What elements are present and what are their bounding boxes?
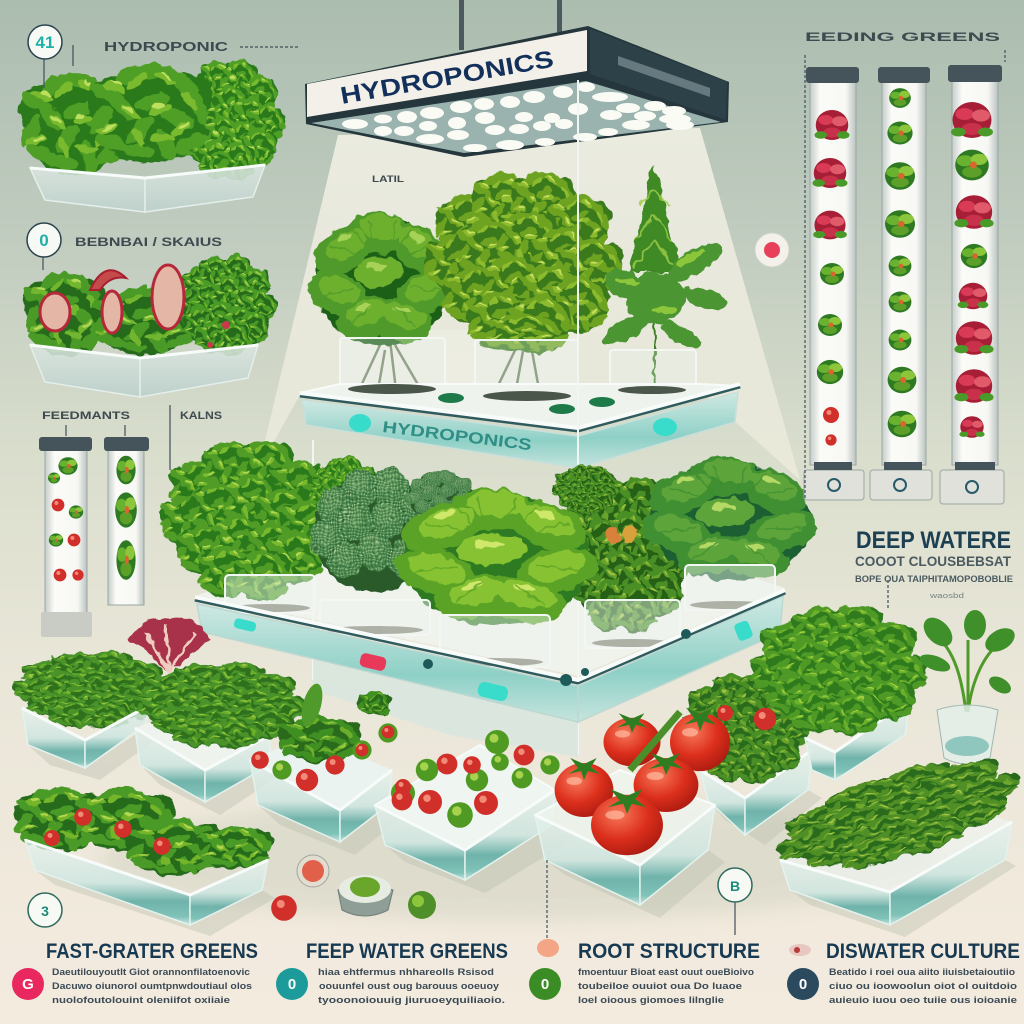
bottom-right herb tray xyxy=(780,790,1012,925)
lower badge right: B xyxy=(730,878,740,894)
upper glass wall fill xyxy=(340,330,578,395)
lower badge left xyxy=(28,893,62,927)
column: water greens: tyooonoiouuig jiuruoeyquiliaoio. xyxy=(318,995,505,1006)
right tube 1 xyxy=(804,67,864,500)
dashed drop to root heading xyxy=(537,860,559,957)
lower deck surface xyxy=(197,560,785,676)
second badge: 0 xyxy=(39,231,49,250)
column: fast greens: FAST-GRATER GREENS xyxy=(46,940,258,963)
column: root structure xyxy=(529,940,760,1006)
small leafy ball xyxy=(408,891,436,919)
row plant 3 xyxy=(251,681,398,791)
column: water greens: FEEP WATER GREENS xyxy=(306,940,508,963)
deep water text: DEEP WATERE xyxy=(856,527,1011,554)
row tray 9 xyxy=(805,700,910,780)
left tube 2 xyxy=(104,437,149,605)
under-shelf glass xyxy=(313,660,578,757)
top-left label: HYDROPONIC xyxy=(104,39,229,54)
cut tomato xyxy=(297,855,329,887)
top-left plant xyxy=(17,58,284,181)
small label: lab: LATIL xyxy=(372,174,405,184)
middle plant: dark broccoli xyxy=(310,468,475,592)
jar soil lower xyxy=(230,601,770,666)
tomatoes xyxy=(555,707,730,855)
deep water text: waosbd xyxy=(929,593,964,600)
middle plant: broad leaf xyxy=(635,454,823,584)
bowl of greens xyxy=(338,875,393,916)
hanging rods xyxy=(459,0,562,50)
top-left badge xyxy=(28,25,73,88)
vent grille xyxy=(618,56,710,97)
bottom-right herbs xyxy=(763,737,1024,894)
deep water text: COOOT CLOUSBEBSAT xyxy=(855,553,1011,569)
top tier jars xyxy=(340,338,696,400)
floor shadow xyxy=(100,800,940,920)
bottom-left plant xyxy=(11,785,274,876)
middle plant: fern herb xyxy=(551,464,693,634)
bottom-left tray xyxy=(25,840,268,925)
column: culture: auieuio iuou oeo tuiie ous ioioanie xyxy=(829,995,1017,1006)
top tier plant: basil xyxy=(302,209,460,390)
row tray 8 xyxy=(700,750,812,835)
column: root structure: fmoentuur Bioat east ouut oueBioivo xyxy=(578,967,754,978)
shelf lights xyxy=(233,618,257,632)
middle plant: green lettuce xyxy=(158,438,381,601)
column: water greens xyxy=(276,940,508,1006)
red lettuce xyxy=(130,618,210,672)
grow lamp xyxy=(305,26,729,157)
middle jars xyxy=(225,565,775,667)
column: fast greens: Dacuwo oiunorol oumtpnwdoutiaul olos xyxy=(52,981,252,992)
upper shelf xyxy=(300,384,740,468)
row tray 2 xyxy=(135,700,270,802)
lower badge left: 3 xyxy=(41,903,49,919)
jar soil xyxy=(348,384,686,401)
third labels: FEEDMANTS xyxy=(42,410,130,422)
row plant 1 xyxy=(11,651,173,729)
column: root structure: 0 xyxy=(541,976,549,993)
top-left badge: 41 xyxy=(36,33,54,52)
row tray 4 with berries xyxy=(375,730,560,880)
leader lines xyxy=(805,50,1005,610)
small icon over culture heading xyxy=(789,944,811,956)
column: root structure: loel oioous giomoes lilnglie xyxy=(578,995,724,1006)
potted plant xyxy=(918,610,1019,764)
row tray 3 xyxy=(250,735,392,842)
column: fast greens: Daeutilouyoutlt Giot orannonfilatoenovic xyxy=(52,967,250,978)
third labels xyxy=(42,405,222,470)
column: root structure: toubeiloe ouuiot oua Do luaoe xyxy=(578,981,742,992)
middle plant: butter lettuce xyxy=(386,485,606,630)
column: culture: ciuo ou ioowoolun oiot ol ouitdoio xyxy=(829,981,1017,992)
column: culture xyxy=(787,940,1020,1006)
lower shelf xyxy=(195,590,785,722)
deep water text: BOPE OUA TAIPHITAMOPOBOBLIE xyxy=(855,574,1013,584)
left tube 1 xyxy=(39,437,92,637)
column: water greens: hiaa ehtfermus nhhareolls Rsisod xyxy=(318,967,494,978)
row tray 1 xyxy=(22,705,150,768)
light beam xyxy=(258,128,800,480)
column: fast greens xyxy=(12,940,258,1006)
second badge xyxy=(27,223,61,270)
column: water greens: oouunfel oust oug barouus ooeuoy xyxy=(319,981,500,992)
tomato tray xyxy=(535,770,715,905)
column: water greens: 0 xyxy=(288,976,296,993)
glass walls xyxy=(313,80,578,755)
right tube 3 xyxy=(940,65,1004,504)
column: root structure: ROOT STRUCTURE xyxy=(578,940,760,963)
column: culture: Beatido i roei oua aiito iiuisbetaioutiio xyxy=(829,967,1015,978)
row plant 2 xyxy=(132,662,308,748)
column: fast greens: nuolofoutolouint oleniifot oxiiaie xyxy=(52,995,230,1006)
row plant 8 xyxy=(680,672,810,784)
large bush xyxy=(748,604,928,735)
top tier plant: broccoli xyxy=(422,170,625,395)
lower badge right xyxy=(718,868,752,935)
tray shadows xyxy=(28,725,1016,937)
lamp title: HYDROPONICS xyxy=(338,46,556,110)
deep water text xyxy=(855,527,1013,600)
column: culture: 0 xyxy=(799,976,807,993)
shelf label: HYDROPONICS xyxy=(382,419,533,454)
top tier plant: fern xyxy=(599,165,730,390)
top-left tray xyxy=(30,165,265,212)
second-left tray xyxy=(30,345,258,397)
LED array xyxy=(342,82,694,152)
shelf holes xyxy=(438,393,615,414)
red callout xyxy=(755,233,789,267)
second label: BEBNBAI / SKAIUS xyxy=(75,235,222,249)
shelf lights xyxy=(349,414,677,436)
small tomato xyxy=(271,895,297,921)
right tube 2 xyxy=(870,67,932,500)
top-right label: EEDING GREENS xyxy=(805,30,1000,44)
second-left plant: red-veined leaves xyxy=(20,254,277,357)
column: fast greens: G xyxy=(22,976,34,993)
third labels: KALNS xyxy=(180,410,222,422)
